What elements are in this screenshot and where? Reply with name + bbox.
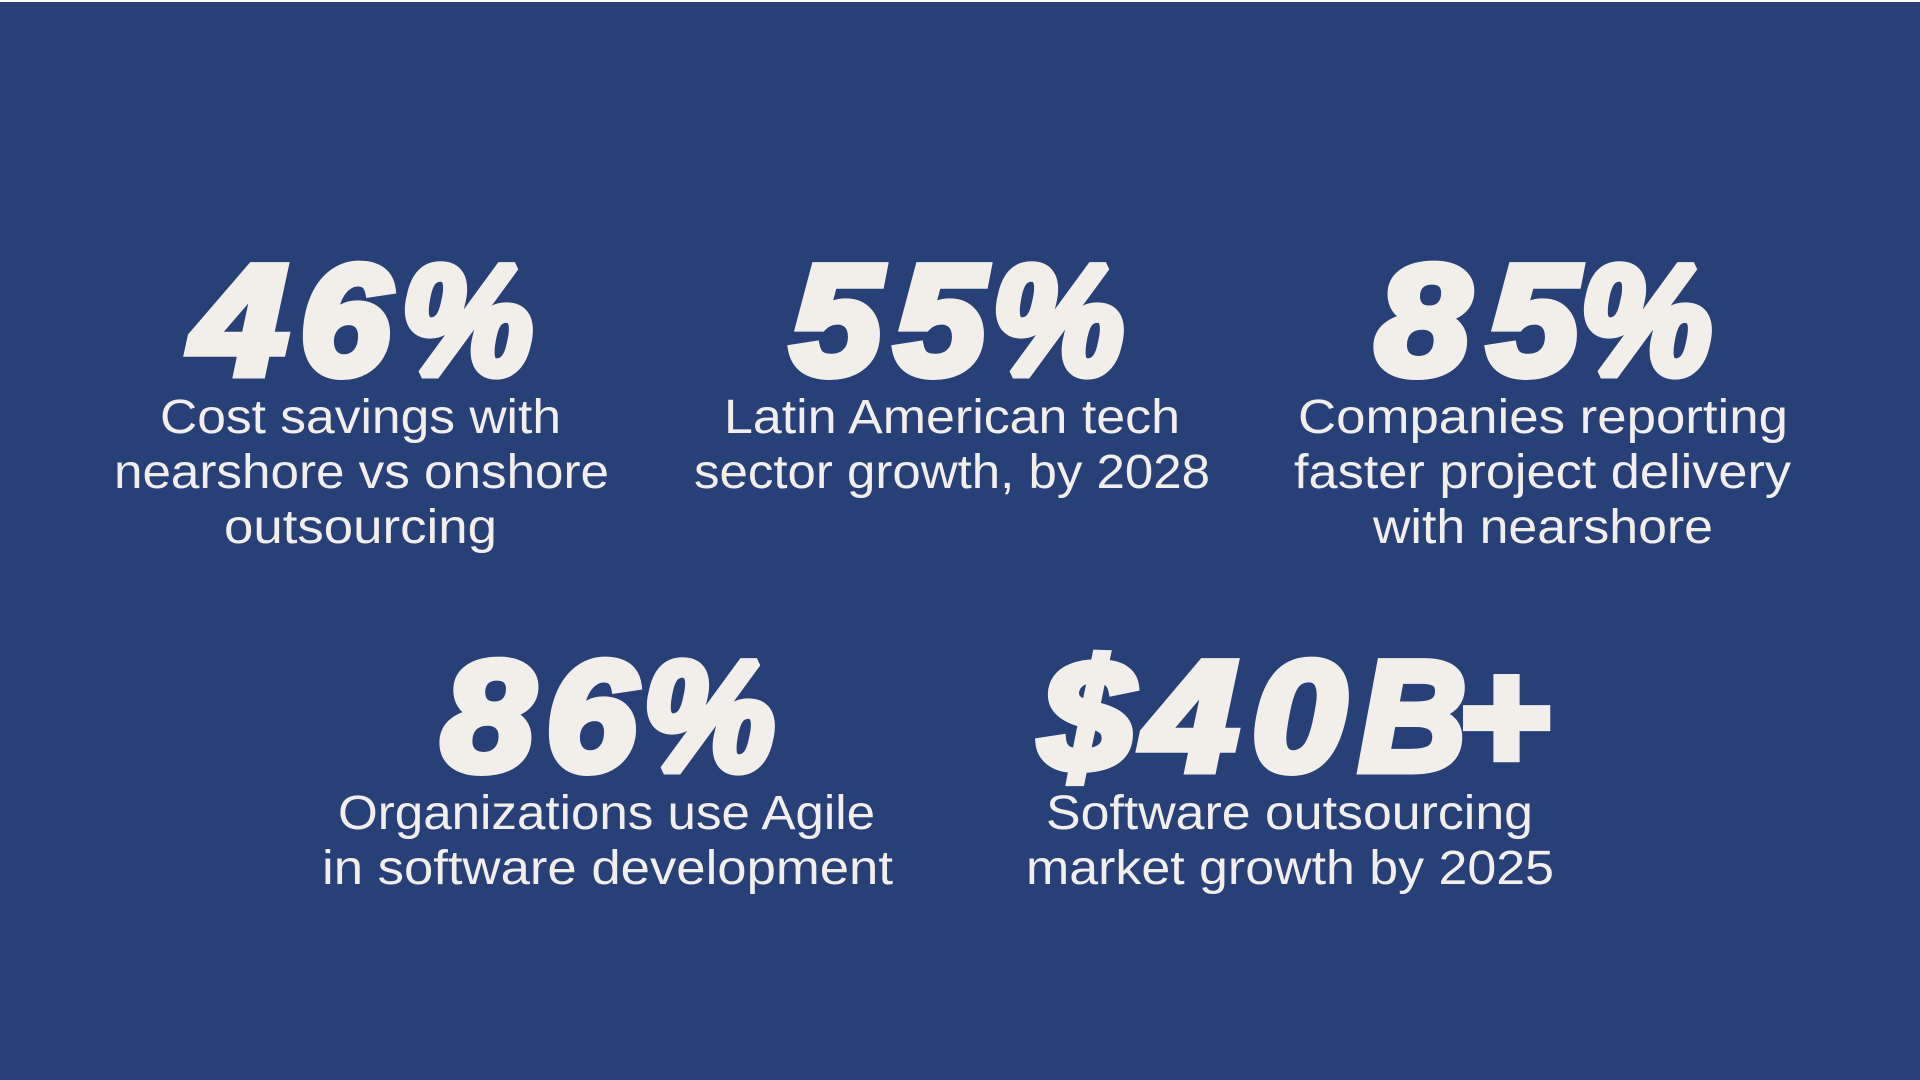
stat: 46% cost savings [114,233,609,554]
description: cost savings [114,391,609,554]
description: cost savings: nearshore vs onshore [114,446,609,499]
number: 86%: % [643,630,775,804]
description: faster delivery: Companies reporting [1298,391,1788,444]
number: 46%: % [401,234,533,408]
number: 85%: 8 [1376,234,1470,408]
description: tech sector growth: sector growth, by 2028 [694,446,1210,499]
description: faster delivery: faster project delivery [1294,446,1791,499]
number: $40B+ [1040,629,1549,804]
number: 86%: 6 [546,629,638,803]
number: 55%: % [992,234,1124,408]
description: market growth: Software outsourcing [1046,787,1533,840]
number: 46%: 4 [189,233,287,407]
stat: 85% faster delivery [1294,233,1791,554]
description: agile use: in software development [322,842,893,895]
number: 85% [1376,233,1712,408]
number: 55% [791,233,1124,408]
stat: $40B+ market growth [1026,629,1554,895]
number: $40B+: 0 [1252,630,1346,804]
number: $40B+: 4 [1141,630,1238,804]
number: $40B+: + [1458,630,1549,804]
number: 55%: 5 [895,233,988,407]
description: tech sector growth: Latin American tech [724,391,1180,444]
number: 46% [189,233,533,408]
description: faster delivery: with nearshore [1372,501,1713,554]
description: cost savings: Cost savings with [160,391,561,444]
description: market growth: market growth by 2025 [1026,842,1554,895]
number: $40B+: B [1359,630,1466,804]
number: 46%: 6 [300,233,392,407]
number: $40B+: $ [1040,629,1135,804]
number: 86%: 8 [442,629,535,804]
description: agile use: Organizations use Agile [338,787,875,840]
description: tech sector growth [694,391,1210,499]
description: market growth [1026,787,1554,895]
description: cost savings: outsourcing [224,501,497,554]
number: 55%: 5 [791,233,884,407]
number: 85%: % [1580,234,1712,408]
description: faster delivery [1294,391,1791,554]
stat: 86% agile use [322,629,893,895]
description: agile use [322,787,893,895]
number: 86% [442,629,775,804]
stat: 55% tech sector growth [694,233,1210,499]
number: 85%: 5 [1488,233,1581,407]
